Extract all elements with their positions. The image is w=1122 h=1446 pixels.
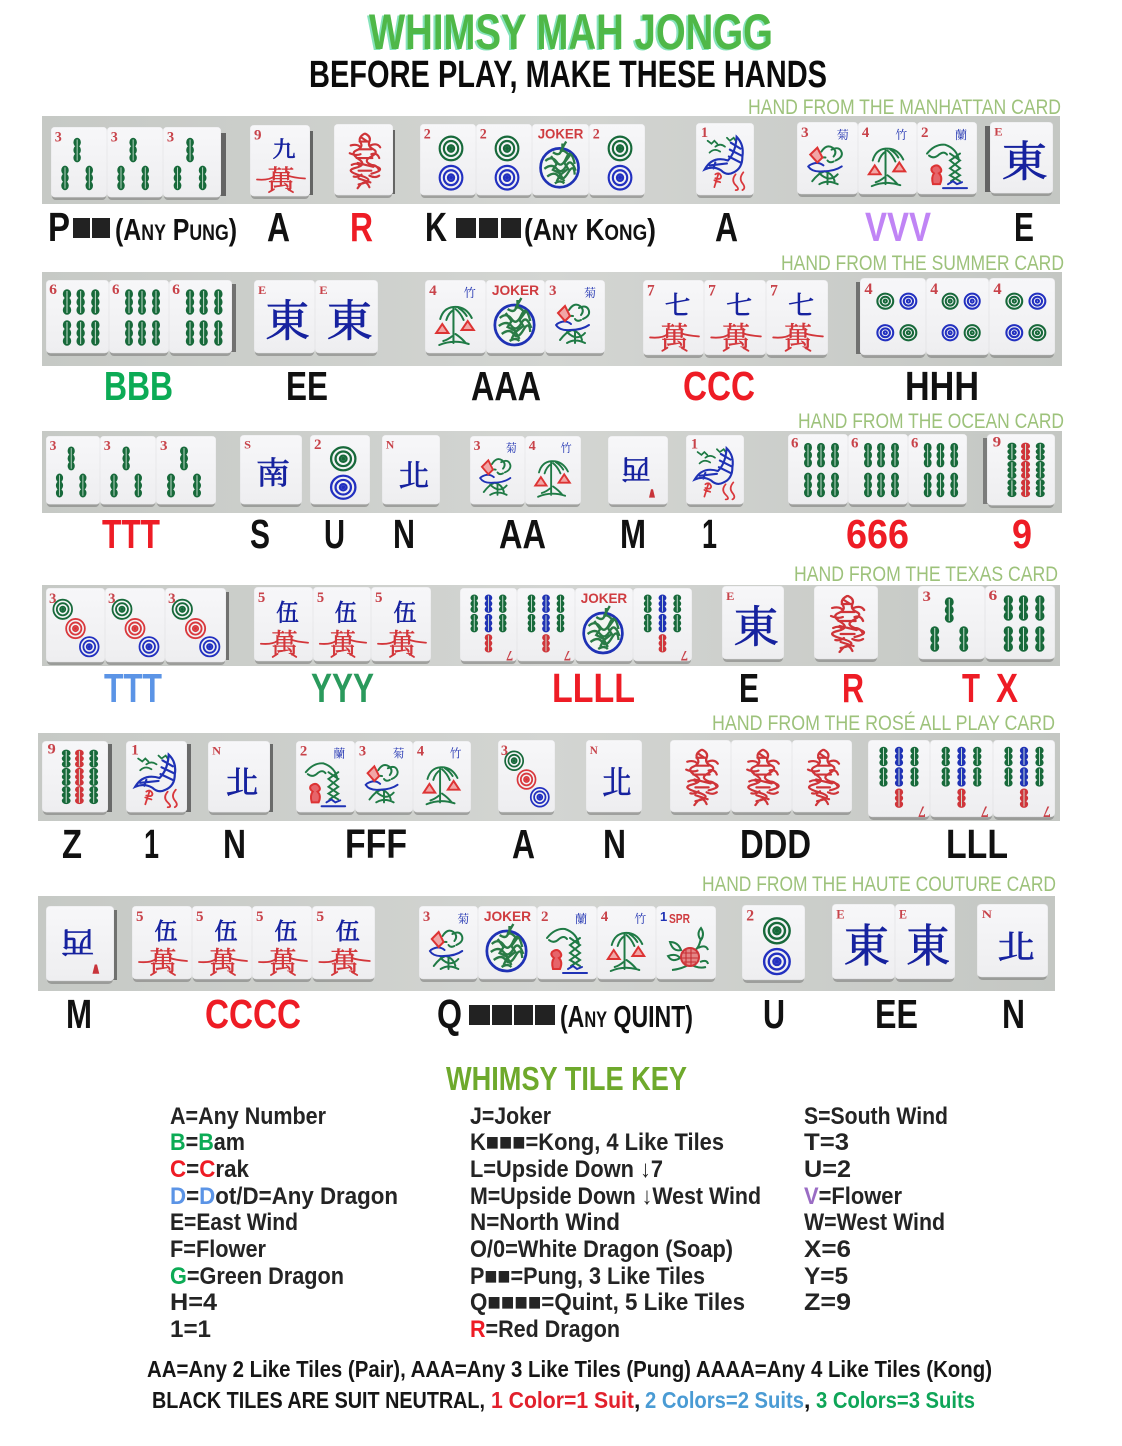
tile: 1 bam [696,123,754,198]
label: TTT: TTT [102,511,160,557]
tile: 3 bam [51,127,107,200]
key column 3: U=2 [804,1156,851,1183]
title: WHIMSY MAH JONGG [369,4,773,60]
tile: flower 3 [470,436,525,507]
tile: east wind [832,904,895,982]
label: HHH: HHH [905,363,979,409]
key column 3: V=Flower [804,1183,902,1210]
tile: upside-down 7 bam [633,588,692,664]
tile: 7 crak [766,280,828,358]
label: E: E [739,665,759,711]
tile: flower 3 [545,280,605,356]
panel: Haute Couture card hand [38,873,1056,1037]
tile: joker [575,588,633,664]
tile band [42,431,1062,513]
tile: east wind [990,122,1053,196]
tile: 7 crak [704,280,766,358]
label: LLLL: LLLL [552,665,635,711]
tile: 6 bam [985,586,1055,662]
note: suit colours: BLACK TILES ARE SUIT NEUTRAL, [152,1387,485,1413]
label: R: R [350,204,373,250]
side shadows [983,438,988,504]
key column 2: J=Joker [470,1103,551,1130]
label: Q quint [437,991,693,1037]
tile: flower 3 [355,741,413,815]
key column 1: D=Dot/D=Any Dragon [170,1183,398,1210]
card caption: HAND FROM THE MANHATTAN CARD [748,96,1061,119]
label: R: R [842,665,864,711]
tile: 3 bam [156,436,216,507]
heading: whimsy tile key: WHIMSY TILE KEY [446,1060,687,1097]
label: E: E [1014,204,1034,250]
tile: east wind [722,586,784,662]
label: CCCC: CCCC [205,991,301,1037]
tile: 4 dot [926,278,989,358]
label: 1: 1 [144,821,159,867]
key column 3: Y=5 [804,1263,848,1290]
tile: 2 dot [589,124,645,198]
tile: 3 bam [163,127,221,200]
key column 3: W=West Wind [804,1209,945,1236]
note: suit colours: , [804,1387,810,1413]
label: N: N [603,821,626,867]
label: TTT: TTT [104,665,162,711]
label: X: X [996,665,1018,711]
tile: flower 3 [797,122,858,197]
panel: Manhattan card hand [42,96,1061,250]
key column 1: E=East Wind [170,1209,298,1236]
tile: flower 2 [537,906,597,982]
tile: 5 crak [313,587,371,664]
key column 2: N=North Wind [470,1209,620,1236]
note: suit colours: , [634,1387,640,1413]
tile: south wind [240,435,302,507]
tile: flower 4 [425,280,486,356]
label: T: T [962,665,980,711]
key column 2: M=Upside Down ↓West Wind [470,1183,761,1210]
tile band [38,896,1055,991]
panel: Rose All Play card hand [38,712,1060,867]
tile: 7 crak [643,280,704,358]
tile: red dragon [670,740,731,815]
card caption: HAND FROM THE ROSÉ ALL PLAY CARD [712,712,1055,735]
tile: 5 crak [254,587,313,664]
tile: 2 dot [310,435,370,507]
label: DDD: DDD [740,821,811,867]
label: A: A [715,204,738,250]
tile: flower 4 [525,436,581,507]
panel: Summer card hand [42,252,1064,409]
tile: red dragon [792,740,852,815]
tile: 4 dot [989,278,1055,358]
tile: upside-down 7 bam [460,588,517,664]
tile: 5 crak [192,906,252,982]
side shadows [231,282,861,354]
label: P pung [48,204,237,250]
key column 1: C=Crak [170,1156,250,1183]
tile: 1 bam [686,435,744,507]
tile band [42,585,1060,666]
label: FFF: FFF [345,821,407,867]
key column 1: B=Bam [170,1129,245,1156]
tile: 3 bam [107,127,163,200]
key column 1 [170,1103,398,1343]
tile: 6 bam [109,280,169,356]
card caption: HAND FROM THE OCEAN CARD [798,410,1064,433]
tile: north wind [586,740,642,815]
key column 1: F=Flower [170,1236,266,1263]
label: 1: 1 [702,511,717,557]
tile: 6 bam [848,434,908,507]
side shadows [113,910,117,980]
tile: joker [532,124,589,198]
side shadows [225,592,229,660]
key column 3 [804,1103,948,1316]
tile: 2 dot [476,124,532,198]
label: K kong [425,204,656,250]
tile: upside-down 7 bam [930,740,993,820]
card caption: HAND FROM THE SUMMER CARD [781,252,1064,275]
key column 1: H=4 [170,1289,218,1316]
note: suit colours [152,1387,975,1413]
tile: flower 2 [296,741,355,815]
tile: flower 4 [413,741,471,815]
tile: 5 crak [132,906,192,982]
note: suit colours: 2 Colors=2 Suits [645,1387,804,1413]
label: A: A [267,204,290,250]
note: suit colours: 3 Colors=3 Suits [816,1387,975,1413]
label: U: U [324,511,345,557]
label: P pung: P [48,204,70,250]
tile: flower 1 spring [656,906,716,982]
note: like tile counts: AA=Any 2 Like Tiles (Pair), AAA=Any 3 Like Tiles (Pung) AAAA=Any 4 Like Tiles (Kong) [147,1356,992,1382]
label: K kong: K [425,204,447,250]
label: Z: Z [62,821,82,867]
tile: 2 dot [742,905,805,983]
subtitle: BEFORE PLAY, MAKE THESE HANDS [309,54,827,96]
tile: north wind [208,741,270,815]
label: VVV: VVV [865,204,932,250]
label: LLL: LLL [946,821,1008,867]
key column 2: R=Red Dragon [470,1316,620,1343]
tile band [42,116,1060,204]
label: N: N [393,511,415,557]
tile: upside-down 7 bam [517,588,575,664]
tile: 3 dot [46,588,105,665]
label: 666: 666 [846,511,909,557]
tile: 3 bam [918,586,985,662]
label: BBB: BBB [104,363,173,409]
label: U: U [763,991,785,1037]
label: Q quint: Q [437,991,462,1037]
side shadows [107,744,273,812]
label: M: M [66,991,92,1037]
tile band [38,733,1060,821]
label: K kong: (Any Kong) [524,212,656,247]
tile: east wind [254,280,315,356]
note: suit colours: 1 Color=1 Suit [491,1387,634,1413]
key column 3: X=6 [804,1236,851,1263]
key column 3: Z=9 [804,1289,851,1316]
tile: 6 bam [788,434,848,507]
tile: 5 crak [371,587,431,664]
key column 1: A=Any Number [170,1103,326,1130]
label: N: N [1002,991,1025,1037]
tile: north wind [382,435,440,507]
panel: Texas card hand [42,563,1060,711]
tile: flower 2 [917,122,977,197]
tile: 9 bam [42,741,108,815]
panel: Ocean card hand [42,410,1064,557]
label: S: S [250,511,270,557]
key column 2 [470,1103,761,1343]
label: AAA: AAA [471,363,541,409]
key column 2: P■■=Pung, 3 Like Tiles [470,1263,705,1290]
tile: 2 dot [420,124,476,198]
tile: 3 bam [100,436,156,507]
tile: upside-down west wind [46,906,114,984]
key column 2: O/0=White Dragon (Soap) [470,1236,733,1263]
tile: 9 crak [250,125,310,199]
tile: east wind [895,904,955,982]
label: P pung: (Any Pung) [115,212,237,247]
card caption: HAND FROM THE HAUTE COUTURE CARD [702,873,1056,896]
label: EE: EE [286,363,328,409]
tile: east wind [315,280,378,356]
tile: flower 4 [597,906,656,982]
tile: 6 bam [46,280,109,356]
tile: 1 bam [126,741,187,815]
label: CCC: CCC [683,363,755,409]
tile: north wind [977,904,1048,980]
tile: red dragon [334,124,393,198]
tile: 3 dot [498,740,555,815]
label: A: A [512,821,535,867]
key column 2: L=Upside Down ↓7 [470,1156,663,1183]
card caption: HAND FROM THE TEXAS CARD [794,563,1058,586]
tile: 5 crak [312,906,375,982]
label: AA: AA [499,511,546,557]
tile: 6 bam [169,280,232,356]
key column 2: K■■■=Kong, 4 Like Tiles [470,1129,724,1156]
tile: red dragon [814,586,878,662]
tile: 3 bam [46,436,100,507]
tile: 3 dot [165,588,226,665]
label: M: M [620,511,646,557]
key column 1: G=Green Dragon [170,1263,344,1290]
tile: red dragon [731,740,792,815]
label: YYY: YYY [311,665,374,711]
tile: upside-down 7 bam [993,740,1055,820]
key column 2: Q■■■■=Quint, 5 Like Tiles [470,1289,745,1316]
tile: 3 dot [105,588,165,665]
key column 3: S=South Wind [804,1103,948,1130]
key column 1: 1=1 [170,1316,211,1343]
tile: upside-down west wind [608,436,668,507]
label: 9: 9 [1012,511,1032,557]
tile: 5 crak [252,906,312,982]
key column 3: T=3 [804,1129,849,1156]
tile: joker [486,280,545,356]
tile: 9 bam [987,434,1055,508]
tile: flower 3 [419,906,478,982]
title: WHIMSY MAH JONGG [367,5,771,61]
tile: 6 bam [908,434,967,507]
label: N: N [223,821,246,867]
tile: 4 dot [860,278,926,358]
tile band [42,272,1062,366]
tile: flower 4 [858,122,917,197]
label: Q quint: (Any QUINT) [560,999,693,1034]
label: EE: EE [875,991,918,1037]
side shadows [220,126,991,196]
tile: upside-down 7 bam [868,740,930,820]
tile: joker [478,906,537,982]
